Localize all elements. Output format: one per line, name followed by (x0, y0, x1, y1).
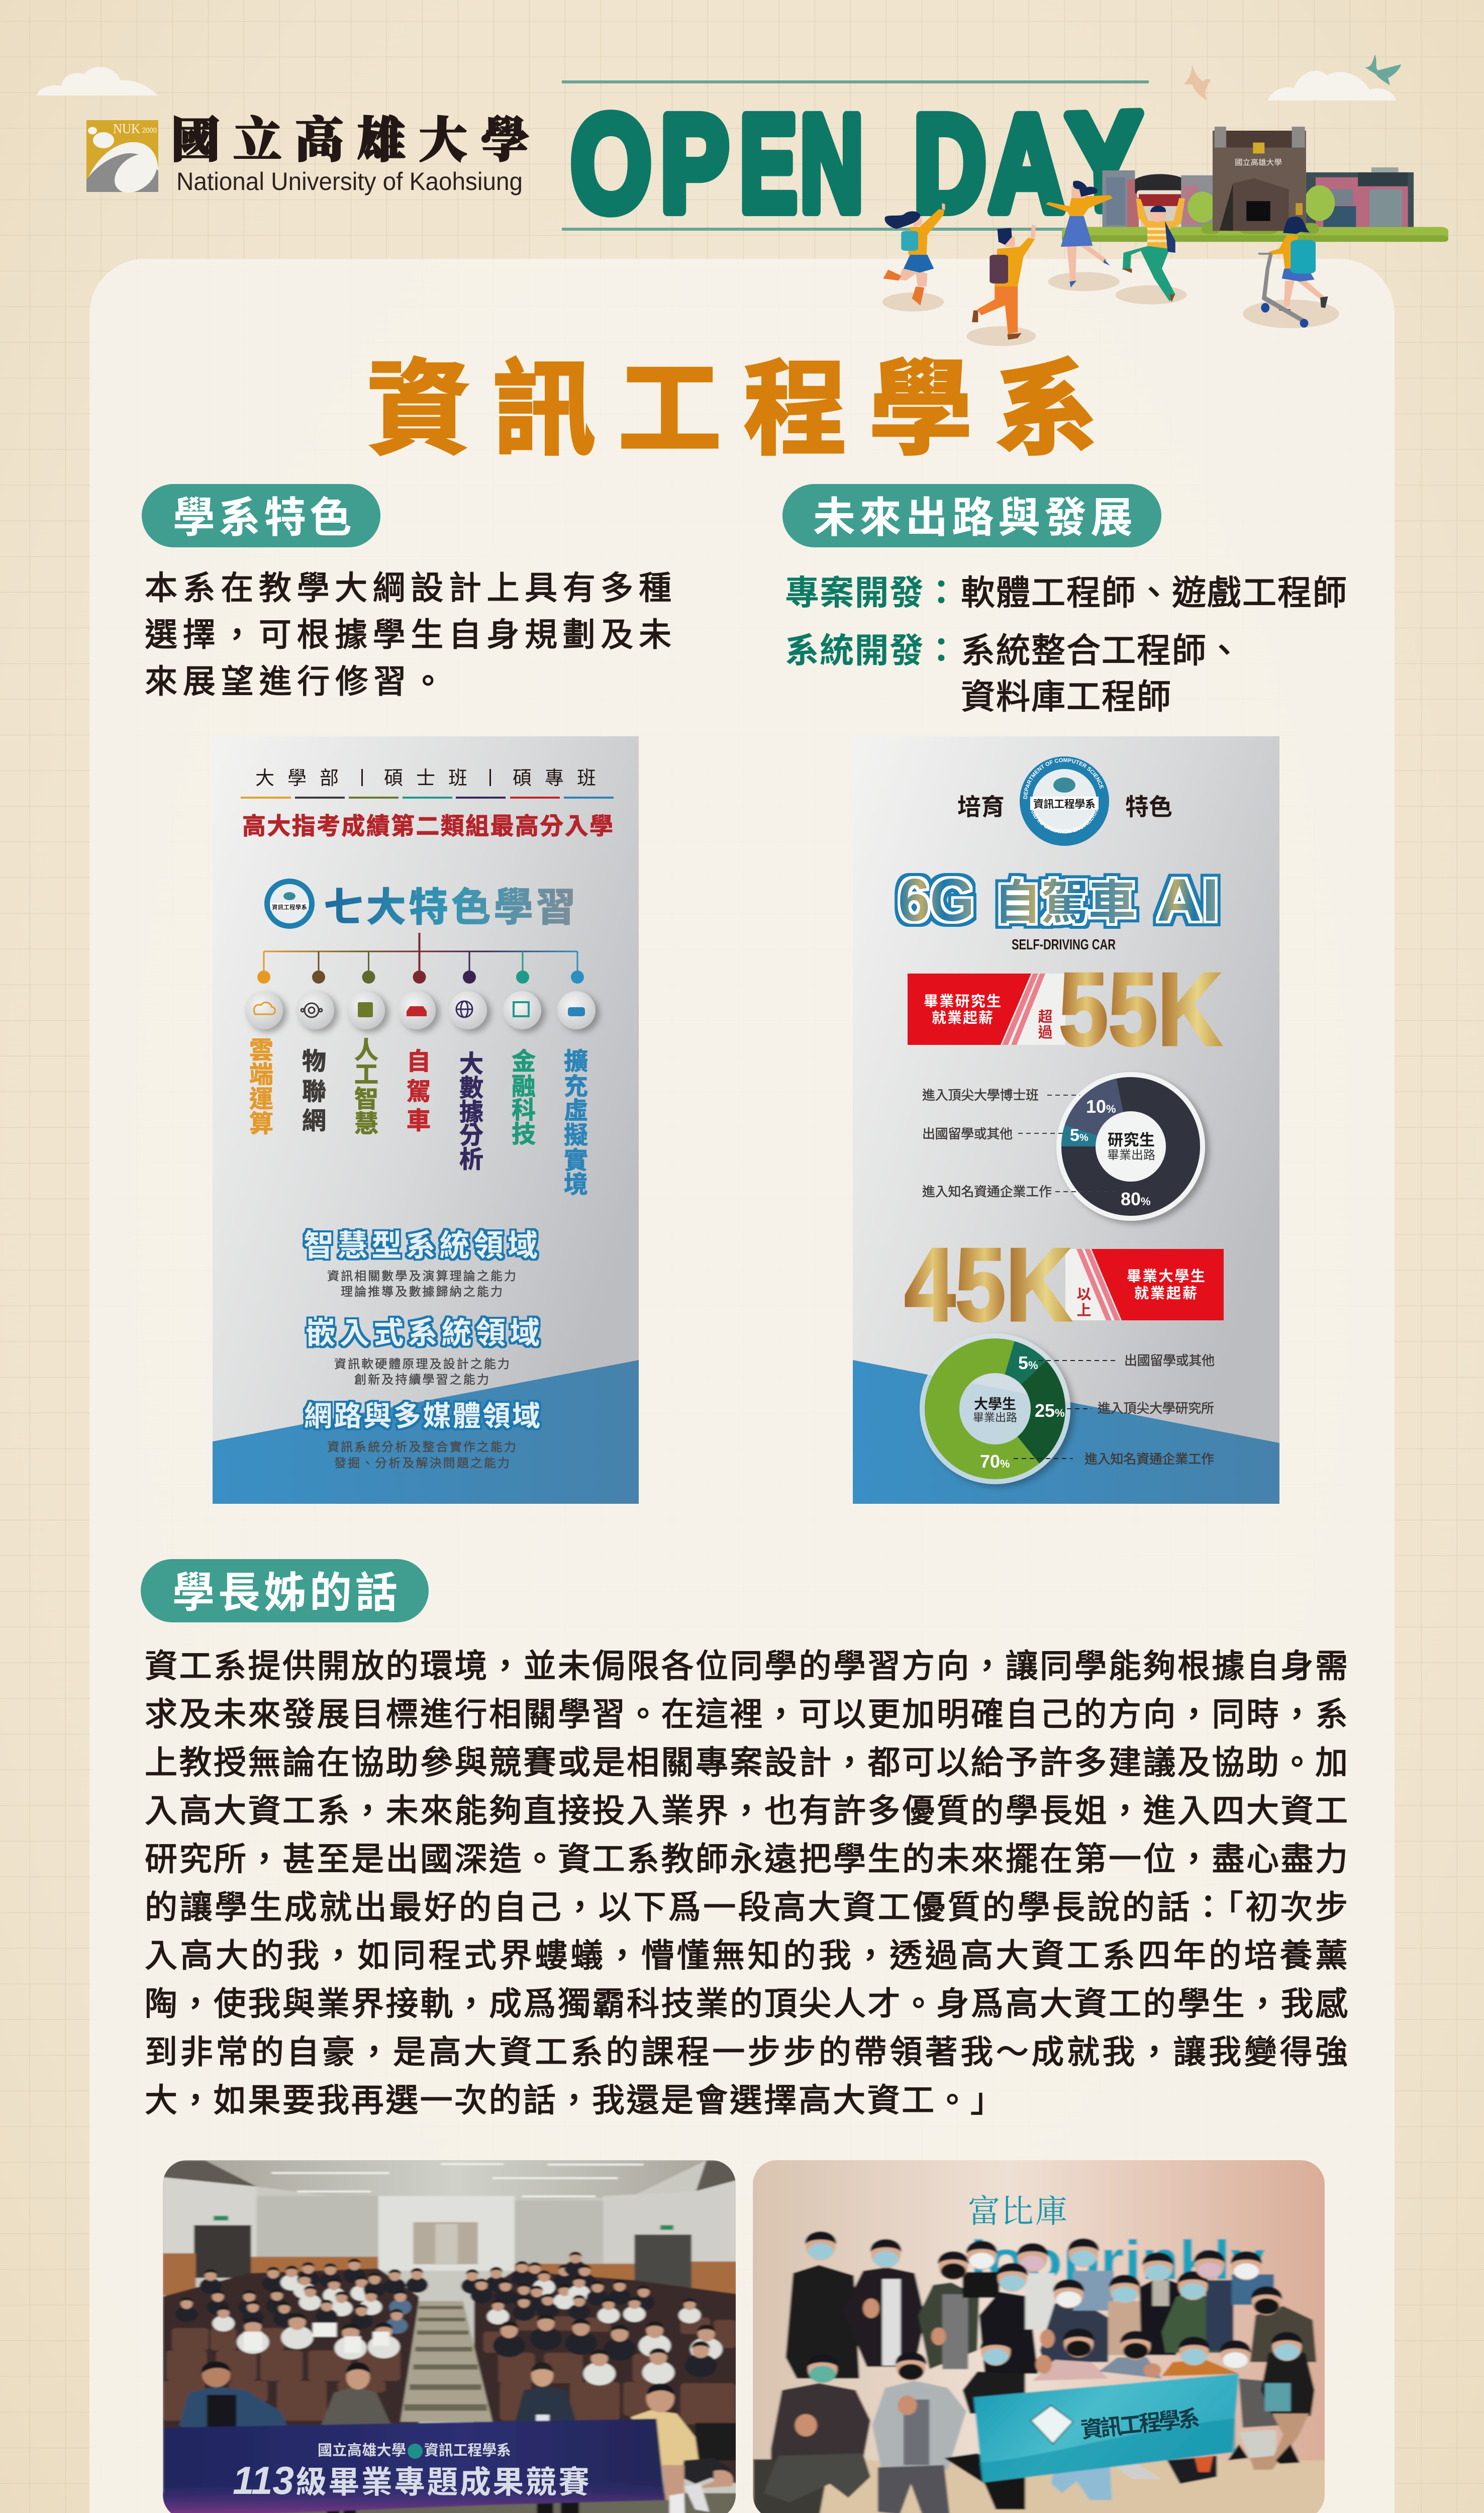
vertical labels: 虛 (564, 1098, 588, 1124)
text: features description: 來展望進行修習。 (145, 663, 444, 700)
icon: right cloud (1268, 71, 1396, 101)
chart labels: undergraduate outcomes: 出國留學或其他 (1124, 1353, 1215, 1368)
text: features description (145, 569, 671, 700)
vertical labels: 擴 (564, 1048, 588, 1075)
vertical labels: 技 (512, 1121, 536, 1148)
vertical labels: 算 (249, 1111, 273, 1137)
icon: book (514, 1002, 529, 1016)
wall and floor (749, 2156, 1327, 2513)
heading: OPEN DAY: O (571, 87, 651, 240)
domain: embedded systems: 嵌入式系統領域 (306, 1316, 540, 1350)
domain: networks and multimedia: 資訊系統分析及整合實作之能力 (327, 1440, 516, 1454)
banner: graduate salary: 55K (1059, 951, 1222, 1067)
domain: networks and multimedia (304, 1400, 540, 1470)
programme list (255, 768, 596, 789)
front row people (179, 2361, 739, 2460)
vertical labels: 工 (354, 1061, 378, 1088)
thumbs up hands (795, 2298, 1161, 2437)
vertical labels: 充 (564, 1074, 588, 1100)
chart labels: undergraduate outcomes: 進入頂尖大學研究所 (1098, 1401, 1214, 1416)
illustration: tower sign text: 國立高雄大學 (1235, 158, 1282, 167)
student 1 (883, 203, 945, 306)
title: department name: 資訊工程學系 (367, 352, 1098, 467)
banner: undergraduate salary: 畢業大學生 (1127, 1268, 1205, 1285)
subtitle: self-driving car: SELF-DRIVING CAR (1012, 937, 1116, 953)
audience far rows (175, 2252, 701, 2334)
heading pill: department features (142, 484, 380, 547)
icon: department badge (264, 879, 315, 929)
student 5 on scooter (1258, 217, 1328, 328)
tree connector (264, 933, 577, 973)
heading rules (562, 80, 1149, 231)
panel: department features (142, 484, 671, 700)
banner: graduate salary: 超 (1038, 1009, 1053, 1025)
room (161, 2156, 739, 2513)
chart: graduate student outcomes donut: 10% (1086, 1096, 1116, 1117)
banner text: department name: 資訊工程學系 (1079, 2406, 1201, 2443)
icon: chip (358, 1002, 373, 1017)
vertical labels: 人 (354, 1037, 378, 1064)
programme list: 碩士班 (384, 768, 467, 789)
vertical labels: 慧 (354, 1111, 378, 1137)
heading: 6G self-driving AI: 6G (898, 866, 974, 934)
chart labels: graduate outcomes: 進入頂尖大學博士班 (922, 1088, 1039, 1103)
icon: teal bird (1365, 54, 1401, 85)
text: system development careers: 資料庫工程師 (961, 678, 1171, 716)
programme list: 碩專班 (513, 768, 596, 789)
photo banner: department line: 國立高雄大學 (318, 2442, 406, 2459)
heading: 6G self-driving AI: 自駕車 (994, 876, 1136, 929)
heading: OPEN DAY: E (740, 87, 797, 240)
photo banner: competition title: 級畢業專題成果競賽 (295, 2465, 589, 2500)
text: system development careers (785, 632, 1241, 716)
banner: undergraduate salary (905, 1227, 1224, 1342)
vertical labels: 科 (512, 1097, 536, 1124)
chart: graduate student outcomes donut: 80% (1121, 1189, 1151, 1209)
vertical labels: 析 (459, 1146, 483, 1173)
icon: department badge: 資訊工程學系 (272, 904, 307, 911)
stairs (401, 2301, 492, 2422)
panel: main content card (89, 259, 1395, 2513)
icon: department badge large: 資訊工程學系 (1033, 798, 1096, 810)
heading pill: careers (782, 484, 1161, 547)
chart labels: undergraduate outcomes: 進入知名資通企業工作 (1084, 1452, 1214, 1467)
left buildings (1102, 170, 1213, 227)
logo: NUK emblem (86, 120, 164, 201)
text: alumni testimonial: 陶，使我與業界接軌，成爲獨霸科技業的頂尖人才。身爲高大資工的學生，我感 (145, 1985, 1348, 2022)
text: features description: 本系在教學大綱設計上具有多種 (145, 569, 671, 606)
banner: undergraduate salary: 上 (1076, 1302, 1092, 1319)
icon discs (245, 991, 596, 1029)
trees (1188, 185, 1335, 234)
heading: OPEN DAY: N (800, 87, 863, 240)
text: system development careers: 系統整合工程師、 (961, 632, 1241, 670)
logo: university Chinese name: 國立高雄大學 (171, 114, 529, 167)
text: alumni testimonial: 到非常的自豪，是高大資工系的課程一步步的帶領著我～成就我，讓我變得強 (145, 2034, 1348, 2070)
vertical labels: 自 (407, 1048, 431, 1075)
heading: OPEN DAY: A (989, 87, 1064, 240)
front row faces (807, 2329, 1303, 2383)
domain: networks and multimedia: 發掘、分析及解決問題之能力 (334, 1457, 510, 1470)
icon: car (407, 1006, 427, 1016)
heading: 6G self-driving AI (898, 866, 1219, 934)
chart: undergraduate outcomes donut (920, 1333, 1070, 1484)
banner: graduate salary (908, 951, 1222, 1067)
icon: VR headset (568, 1007, 585, 1016)
tower (1213, 127, 1306, 231)
heading: 6G self-driving AI: AI (1157, 866, 1219, 934)
floor (161, 2493, 739, 2513)
poster: seven featured studies (213, 736, 639, 1504)
vertical labels: 端 (249, 1061, 273, 1088)
heading: OPEN DAY: P (660, 87, 729, 240)
photo: group at Fubon (749, 2156, 1327, 2513)
chart labels: graduate outcomes: 出國留學或其他 (922, 1126, 1013, 1141)
text: alumni testimonial: 的讓學生成就出最好的自己，以下爲一段高大資工優質的學長說的話：「初次步 (145, 1889, 1348, 1925)
icon: department badge large: AND INFORMATION ENGINEERING (1030, 810, 1098, 833)
text: alumni testimonial: 入高大的我，如同程式界螻蟻，懵懂無知的我，透過高大資工系四年的培養薰 (145, 1937, 1348, 1974)
chart labels: graduate outcomes (922, 1088, 1116, 1199)
front row bodies (763, 2353, 1315, 2513)
vertical labels: 車 (407, 1108, 431, 1134)
icon: peach bird (1184, 64, 1211, 101)
vertical labels: 融 (512, 1074, 536, 1100)
text: alumni testimonial: 入高大資工系，未來能夠直接投入業界，也有許多優質的學長姐，進入四大資工 (145, 1792, 1348, 1829)
seats (163, 2316, 736, 2424)
student 2 (972, 225, 1036, 340)
student 3 (1046, 181, 1113, 287)
text: alumni testimonial: 資工系提供開放的環境，並未侷限各位同學的學習方向，讓同學能夠根據自身需 (145, 1648, 1348, 1684)
domain: embedded systems: 創新及持續學習之能力 (354, 1373, 489, 1387)
icon: left cloud (37, 67, 158, 95)
chart labels: undergraduate outcomes (1014, 1353, 1215, 1467)
chart labels: graduate outcomes: 進入知名資通企業工作 (922, 1184, 1052, 1199)
vertical labels: 境 (564, 1172, 588, 1198)
photo: graduation project competition (161, 2156, 739, 2513)
vertical labels: 大 (459, 1051, 483, 1078)
domain: smart systems: 資訊相關數學及演算理論之能力 (327, 1270, 516, 1283)
photo banner: department line (318, 2442, 511, 2459)
vertical labels: 智 (354, 1086, 378, 1113)
heading: cultivate: 培育 (957, 794, 1005, 820)
domain: embedded systems (306, 1316, 540, 1387)
vertical labels: 數 (459, 1075, 483, 1102)
ground strip (1062, 227, 1448, 242)
photo banner: competition title: 113 (233, 2458, 294, 2502)
heading: features: 特色 (1125, 794, 1172, 820)
text: project development careers (785, 574, 1347, 612)
icon: network (301, 1003, 322, 1017)
photo banner: competition title (233, 2458, 589, 2502)
icon: cloud (254, 1002, 275, 1014)
text: project development careers: 專案開發： (785, 574, 958, 612)
vertical labels: 分 (459, 1122, 483, 1149)
banner: undergraduate salary: 45K (905, 1227, 1071, 1342)
vertical labels: 物 (302, 1048, 326, 1075)
text: alumni testimonial: 研究所，甚至是出國深造。資工系教師永遠把學生的未來擺在第一位，盡心盡力 (145, 1841, 1348, 1877)
banner: undergraduate salary: 以 (1076, 1287, 1092, 1303)
lights (271, 2163, 644, 2197)
chart: graduate student outcomes donut: 研究生 (1108, 1131, 1155, 1149)
banner: graduate salary: 過 (1038, 1024, 1053, 1041)
admission headline: 高大指考成績第二類組最高分入學 (242, 813, 613, 839)
text: alumni testimonial (145, 1648, 1348, 2118)
photo banner: department line: 資訊工程學系 (424, 2442, 511, 2459)
heading: seven studies: 七大特色學習 (324, 885, 575, 929)
vertical labels: 實 (564, 1147, 588, 1174)
audience seating dark base (163, 2268, 739, 2484)
banner: graduate salary: 畢業研究生 (924, 993, 1001, 1010)
heading: OPEN DAY: Y (1065, 83, 1146, 239)
person holding banner (631, 2383, 733, 2513)
chart: graduate student outcomes donut: 畢業出路 (1107, 1148, 1155, 1162)
icon: department badge large: DEPARTMENT OF COMPUTER SCIENCE (1023, 758, 1104, 799)
logo: NUK emblem: NUK (113, 121, 140, 136)
heading pill: department features: 學系特色 (173, 494, 352, 541)
audience mid rows (237, 2313, 722, 2385)
vertical labels: 據 (459, 1099, 483, 1126)
chart: undergraduate outcomes donut: 25% (1035, 1400, 1065, 1421)
vertical labels: 金 (512, 1048, 536, 1075)
chart: graduate student outcomes donut (1056, 1072, 1205, 1221)
department banner cloth (973, 2374, 1239, 2483)
text: features description: 選擇，可根據學生自身規劃及未 (145, 616, 671, 653)
text: system development careers: 系統開發： (785, 632, 958, 670)
chart: undergraduate outcomes donut: 70% (980, 1451, 1010, 1472)
domain: networks and multimedia: 網路與多媒體領域 (304, 1400, 540, 1432)
chart: undergraduate outcomes donut: 大學生 (974, 1396, 1016, 1412)
wall lettering: looprinkly (970, 2229, 1265, 2291)
vertical labels: 駕 (407, 1079, 431, 1105)
vertical labels: 雲 (249, 1037, 273, 1064)
vertical labels: 聯 (302, 1079, 326, 1105)
back row bodies (785, 2265, 1316, 2378)
icon: banner badge (408, 2444, 423, 2459)
text: alumni testimonial: 大，如果要我再選一次的話，我還是會選擇高大資工。」 (145, 2082, 1003, 2118)
heading pill: alumni words: 學長姊的話 (172, 1569, 398, 1616)
logo: NUK emblem: 2000 (142, 126, 157, 135)
illustration: campus and students (882, 127, 1448, 346)
text: alumni testimonial: 求及未來發展目標進行相關學習。在這裡，可以更加明確自己的方向，同時，系 (145, 1696, 1348, 1732)
domain: smart systems: 智慧型系統領域 (304, 1229, 538, 1263)
icon: department badge large (1020, 756, 1109, 846)
banner cloth (163, 2419, 665, 2513)
wall sign: Chinese name: 富比庫 (968, 2194, 1067, 2230)
icon: globe (456, 1001, 472, 1017)
heading pill: alumni words (141, 1559, 429, 1622)
doors and wainscot (163, 2216, 739, 2296)
chart: undergraduate outcomes donut: 5% (1018, 1352, 1038, 1373)
programme list: 大學部 (255, 768, 339, 789)
domain: embedded systems: 資訊軟硬體原理及設計之能力 (334, 1358, 510, 1371)
shadows (882, 272, 1339, 346)
panel: future careers (782, 484, 1347, 716)
vertical labels (249, 1037, 588, 1198)
banner: graduate salary: 就業起薪 (932, 1010, 993, 1026)
back row faces (805, 2232, 1282, 2315)
domain: smart systems: 理論推導及數據歸納之能力 (341, 1285, 503, 1299)
poster: training features (853, 736, 1279, 1504)
heading pill: careers: 未來出路與發展 (813, 494, 1133, 541)
coloured rules (241, 797, 614, 799)
banner: undergraduate salary: 就業起薪 (1134, 1285, 1197, 1302)
chart: graduate student outcomes donut: 5% (1070, 1126, 1089, 1145)
student 4 (1122, 198, 1185, 303)
right buildings (1306, 167, 1414, 227)
text: project development careers: 軟體工程師、遊戲工程師 (961, 574, 1347, 612)
heading: OPEN DAY: D (914, 87, 986, 240)
chart: undergraduate outcomes donut: 畢業出路 (973, 1411, 1017, 1424)
logo: university English name: National University of Kaohsiung (176, 167, 523, 196)
vertical labels: 運 (249, 1086, 273, 1113)
domain: smart systems (304, 1229, 538, 1299)
vertical labels: 網 (302, 1108, 326, 1134)
panel: alumni words (141, 1559, 1348, 2118)
text: alumni testimonial: 上教授無論在協助參與競賽或是相關專案設計，都可以給予許多建議及協助。加 (145, 1744, 1348, 1781)
vertical labels: 擬 (564, 1122, 588, 1149)
heading: OPEN DAY (571, 83, 1146, 240)
connector dots (257, 971, 584, 984)
legs under banner (327, 2502, 579, 2513)
